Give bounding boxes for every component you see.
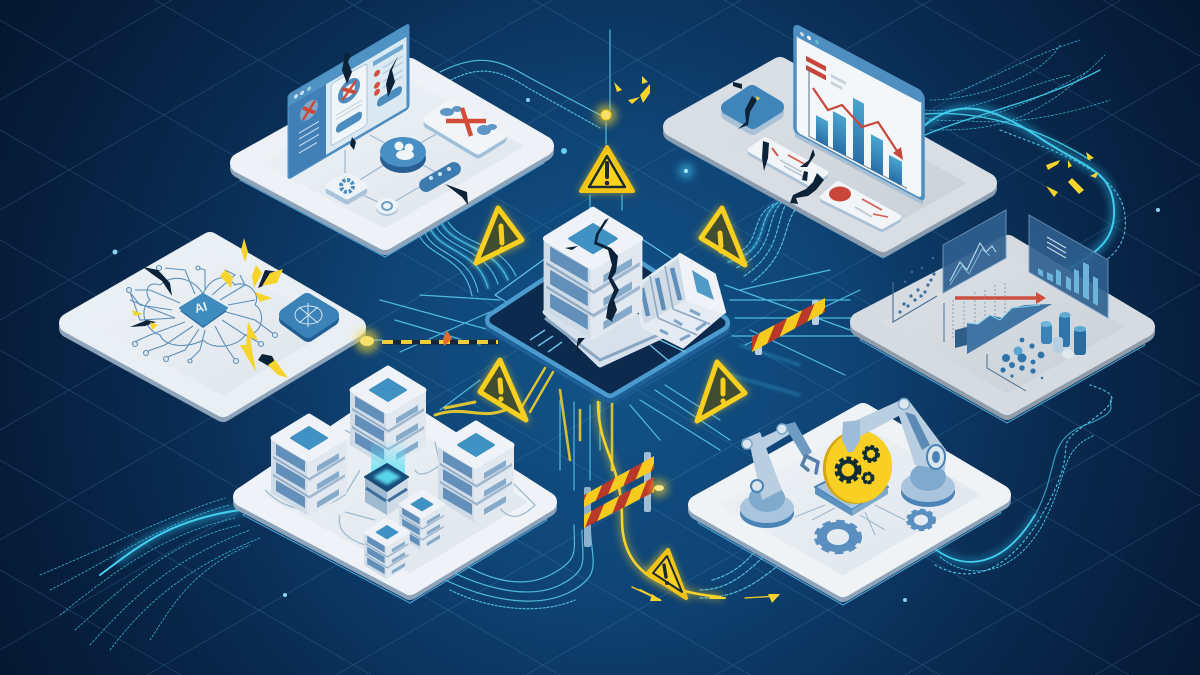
server: small right: [400, 491, 444, 550]
panel: bottom-right platform, robot automation: [698, 398, 1001, 605]
panel: right platform, analytics charts: [860, 210, 1145, 423]
window thickness: [795, 133, 923, 205]
warning: bottom: [643, 546, 690, 602]
cracks: [130, 267, 282, 375]
chart: area chart: [944, 283, 1052, 354]
panel: top-right platform, broken analytics dashboard: [673, 25, 987, 258]
yellow disruption sparks: right: [1046, 152, 1098, 197]
server: left: [273, 416, 345, 514]
tile: brain icon: [286, 300, 332, 335]
barrier: right: [752, 298, 825, 355]
data column: [365, 440, 408, 515]
chip base: [815, 468, 888, 516]
brain circuit: [126, 266, 278, 364]
pill: [417, 159, 463, 195]
chip: AI: [180, 294, 227, 328]
cracks: [565, 218, 619, 358]
glowing nodes: [112, 98, 1160, 602]
hub: user circle: [380, 137, 426, 173]
cracks in window: [342, 52, 398, 150]
server: right: [440, 423, 512, 521]
glowing flow: lower right: [930, 398, 1112, 571]
circuit traces: [795, 505, 905, 535]
panel: central platform with cracked server: [494, 210, 724, 394]
panel: bottom-left platform, data servers: [243, 368, 547, 603]
tile: cracked blue module: [728, 82, 777, 129]
warning: upper left: [472, 204, 526, 267]
chart: bubbles: [987, 338, 1044, 391]
glowing flow: top right: [925, 40, 1114, 280]
gear: large: [818, 523, 858, 551]
connectors: [345, 125, 452, 206]
barrier: bottom: [584, 452, 654, 547]
red arrow: [955, 292, 1046, 304]
window: declining bar chart: [795, 25, 923, 201]
tipped server: [635, 255, 724, 347]
crack: platform edge: [445, 184, 468, 205]
red trend line: [813, 88, 903, 160]
card: cracked stats: [751, 140, 825, 204]
window: cracked user interface: [289, 25, 408, 178]
server: back: [352, 368, 424, 466]
tile: gear: [329, 176, 364, 201]
panel: top-left platform, broken user interface: [240, 25, 544, 257]
yellow flow lines: [435, 368, 778, 600]
chart: cylinders: [1040, 312, 1086, 359]
glowing centre bundles: [430, 200, 800, 395]
warning: lower left: [476, 356, 531, 425]
robot arm: left: [740, 422, 818, 528]
chip: AI: AI: [193, 299, 209, 316]
data flow lines: [368, 30, 1125, 609]
warning: lower right: [693, 358, 749, 425]
circuit traces on platform: [530, 330, 685, 362]
connector traces: [265, 430, 535, 545]
robot arm: right: [842, 398, 955, 507]
main cracked server: [546, 210, 640, 337]
warning: top: [578, 145, 636, 193]
card: crossed-out users: [428, 104, 502, 154]
glass panel: bar chart: [1029, 215, 1108, 318]
server: small front: [365, 519, 409, 578]
panel: left platform, disrupted AI brain: [69, 238, 356, 420]
server base slab: [545, 285, 665, 365]
warning: upper right: [696, 204, 750, 270]
small arrow heads: [650, 594, 780, 603]
glowing flow: bottom left: [40, 498, 260, 650]
small circle node: [376, 198, 398, 216]
yellow disruption sparks: top: [614, 76, 650, 104]
barrier: left tape: [382, 330, 498, 346]
card: pie chart summary: [823, 184, 898, 229]
gear: small: [908, 511, 934, 529]
glass panel: line chart: [943, 210, 1006, 293]
lightning: AI disruption: [132, 238, 288, 378]
chart: scatter plot: [893, 257, 937, 322]
icon: yellow gear disc: [816, 424, 899, 510]
